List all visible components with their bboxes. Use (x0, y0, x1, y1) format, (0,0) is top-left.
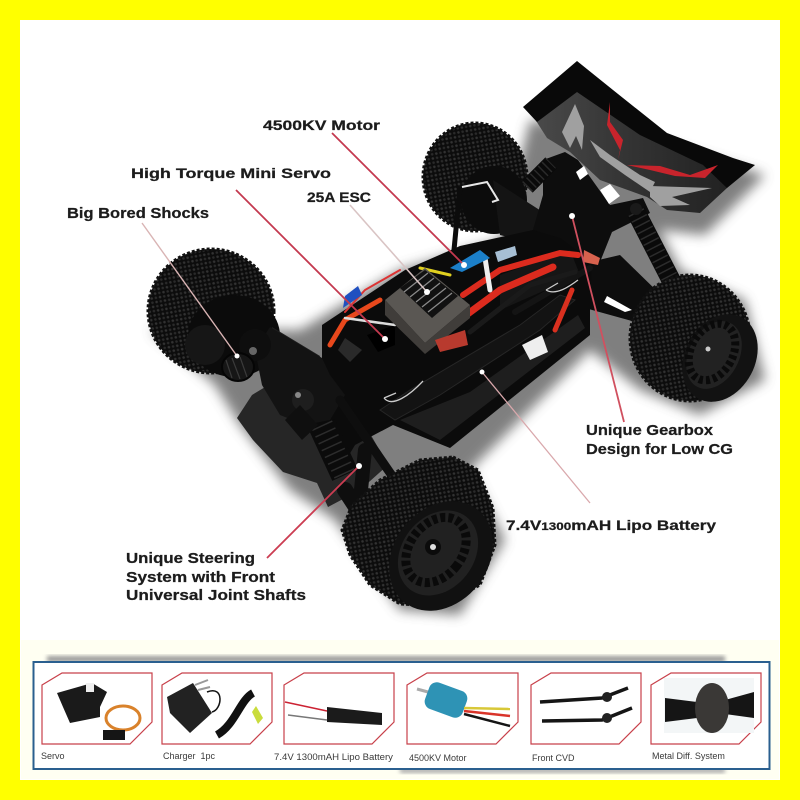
front skid plate (237, 372, 388, 507)
wiring (330, 253, 590, 345)
frame: charger (162, 673, 272, 761)
frame: battery (274, 673, 394, 762)
main chassis and battery tray (280, 230, 592, 470)
wing flames (562, 104, 712, 206)
caption: Servo: Servo (41, 751, 65, 761)
frame: motor (407, 673, 518, 763)
frame: differential (651, 673, 761, 761)
caption: Charger: Charger 1pc (163, 751, 216, 761)
label: Lipo Battery: 7.4V 1300 mAH Lipo Battery (506, 517, 716, 533)
leader: Unique Steering (267, 463, 362, 558)
caption: Motor: 4500KV Motor (409, 753, 467, 763)
leader: Big Bored Shocks (142, 223, 240, 358)
tire: rear left (423, 123, 527, 234)
antenna mount with white wire (454, 182, 498, 250)
label: Unique Gearbox Design: Design for Low CG (586, 441, 733, 458)
label: Unique Steering System (126, 550, 306, 604)
leader: 25A ESC (350, 205, 430, 295)
red connectors (435, 250, 600, 352)
leader: Unique Gearbox (569, 213, 624, 422)
label: Unique Steering System: Unique Steering (126, 550, 255, 567)
label: 4500KV Motor: 4500KV Motor (263, 117, 381, 133)
accessories panel (21, 640, 779, 779)
caption: Diff: Metal Diff. System (652, 751, 725, 761)
rear wing (523, 61, 755, 213)
leader: High Torque Mini Servo (236, 190, 388, 342)
front arm (268, 327, 320, 372)
frame: CVD (531, 673, 641, 763)
front shock tower and bulkhead (239, 327, 345, 425)
tire: rear right (630, 275, 772, 415)
yellow connector (495, 246, 517, 262)
caption: Lipo Battery: 7.4V 1300mAH Lipo Battery (274, 752, 394, 762)
steering arms (340, 400, 395, 510)
speed controller (385, 268, 470, 354)
label: Unique Gearbox Design: Unique Gearbox (586, 422, 714, 439)
label: Unique Gearbox Design (586, 422, 733, 458)
leader: Lipo Battery (480, 370, 590, 503)
blue receiver (343, 286, 362, 308)
blue motor lead (450, 250, 490, 272)
tire: front left (148, 249, 280, 377)
rear right shock (630, 203, 672, 282)
front right shock (285, 389, 345, 475)
front left shock spring (222, 353, 254, 381)
leader: 4500KV Motor (332, 133, 467, 268)
label: 25A ESC: 25A ESC (307, 189, 371, 205)
frame: servo (41, 673, 152, 761)
label: High Torque Mini Servo: High Torque Mini Servo (131, 165, 331, 181)
caption: CVD: Front CVD (532, 753, 575, 763)
rear suspension arms (493, 180, 662, 326)
rear shock tower (530, 152, 650, 262)
white battery plug (522, 335, 548, 360)
rear left shock (527, 163, 551, 187)
label: Big Bored Shocks: Big Bored Shocks (67, 205, 209, 222)
label: Unique Steering System: Universal Joint Shafts (126, 587, 306, 604)
body clips (384, 280, 578, 402)
drop shadow under car (150, 120, 765, 615)
tire: front right (342, 457, 514, 631)
label: Unique Steering System: System with Front (126, 569, 275, 586)
